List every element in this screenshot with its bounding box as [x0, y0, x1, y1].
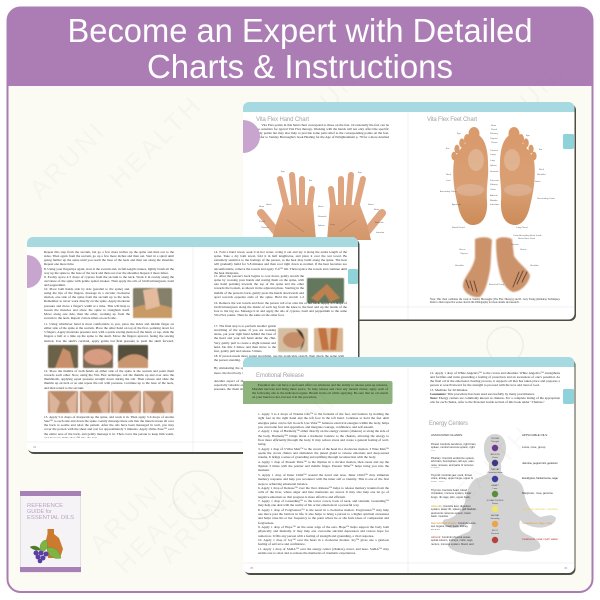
feet chart labels: Lungs: [490, 154, 497, 156]
background watermark: ARUNI: [83, 470, 172, 559]
hand chart labels: Brain: [374, 208, 380, 211]
feet chart labels: Liver: [446, 179, 451, 182]
chakra labels: ROOT: [492, 530, 499, 532]
text block: final steps and notes: 12. Apply 1 drop of White Angelica™ to the crown and shoulder. White Angelica™ strengthens and fortifies and turns grounding a feeling of protection and an awareness of one's potential. As the final oil in the emotional clearing process, it supports all that has taken place and prepares a person to search inward for the strength to proceed with the love and trust of God.: [430, 371, 560, 387]
book title: GUIDE for: [27, 509, 52, 515]
feet chart labels: Eye: [526, 135, 531, 137]
chakra labels: SOLAR PLEXUS: [487, 499, 504, 502]
feet chart labels: Intestines: [490, 203, 500, 206]
background watermark: ARUNI: [283, 55, 372, 144]
book title: ESSENTIAL OILS: [27, 515, 74, 521]
title: Charts & Instructions: [147, 48, 453, 85]
feet chart labels: Ear: [539, 148, 543, 151]
feet chart labels: Pineal: [491, 129, 498, 131]
background watermark: [23, 55, 572, 579]
feet chart labels: Eye: [457, 133, 462, 135]
chakra labels: Thought: [491, 440, 499, 443]
caption: note under feet chart: Note: This chart combines the work of Stanley Burroughs (Vita Flex Therapy) and D. Gary Young (Raindrop Technique). Refer to their respective works cited in the bibliography for more details and research.: [430, 298, 560, 304]
chakra labels: Sexuality: [491, 517, 500, 520]
page numbers: 36: [564, 566, 568, 570]
top of feet labels: Shoulder: [455, 264, 464, 267]
text block: opening steps: 9. Evenly space 4-5 drops of cypress from the sacrum to the neck. Work it in evenly along the curvature of the spine with gentle spinal strokes. Then apply the oils of birch/wintergreen, basil and peppermint.: [44, 275, 174, 287]
text block: emotional release steps: 11. Apply 1 drop of SARA™ over the energy center (chakras), navel, and nose. SARA™ may enable one to relax and to release the memories of traumatic experiences.: [258, 547, 389, 555]
hand chart labels: Intestine: [376, 231, 385, 234]
chakra labels: Love: [493, 488, 498, 490]
feet chart labels: Pancreas: [490, 179, 500, 182]
text block: emotional release steps: 10. Apply 1 drop of Joy™ over the heart in a clockwise motion. Joy™ gives one a glorious feeling of self-love and confidence.: [258, 538, 389, 546]
page number: 34: [33, 445, 37, 449]
title: Become an Expert with Detailed: [68, 12, 532, 49]
hand chart labels: Eye: [358, 172, 363, 174]
chakra labels: [487, 438, 504, 535]
feet chart labels: Kidneys: [490, 184, 499, 186]
icon: grapes: [34, 550, 48, 563]
panel watermark: HEALTH: [433, 419, 538, 524]
text block: steps 18 and closing: Another aspect of the Raindrop Technique is the Kidd Running Technique. Bergamot is an especially valuable oil, the remaining oils can be effective too. To work with these oils under the pressure, the client should lie on the spine and use more to strengthen.: [214, 379, 344, 391]
hand chart labels: Ear: [309, 179, 313, 182]
panel watermark: ARUNI: [63, 315, 152, 404]
hand chart labels: Stomach: [318, 215, 327, 218]
top of feet labels: Uterus: [520, 248, 527, 251]
feet chart labels: Ear: [446, 147, 450, 150]
text block: step 10: 10. Place both hands side by side (parallel to the spine) and, using the tips of the fingers, massage in a circular clockwise motion, one side of the spine from the sacrum up to the neck. Remember to never work directly on the spine. Apply moderate pressure and move a finger's width at a time. This will help to loosen the muscles and allow the spine to straighten itself. Move along one side, then the other, working up from the sacrum to the neck. Repeat 2 more times on each side.: [44, 287, 130, 320]
column headings: [431, 433, 548, 437]
column headings: ASSOCIATED GLANDS:: [431, 433, 463, 437]
top of feet labels: Sacrum: [511, 243, 519, 246]
hand chart labels: Brain: [259, 205, 265, 208]
text block: opening steps: [44, 250, 174, 288]
top of feet labels: Colon Ascending Brain Inside: [513, 234, 542, 237]
tab: teal page marker: [348, 269, 358, 284]
text block: steps 18 and closing: [214, 354, 344, 429]
feet chart labels: Pituitary: [490, 132, 499, 135]
feet chart labels: Ascending Colon: [440, 190, 457, 193]
text block: emotional release steps: 3. Apply 1 drop of 3 Wise Men™ to the crown of the head in a clockwise motion. 3 Wise Men™ opens the crown chakra and stimulates the pineal gland to release emotions and deep-seated trauma. It brings a sense of grounding and uplifting through reconnection with the body.: [258, 447, 389, 459]
feet chart labels: Neck: [446, 174, 452, 176]
list: applicable oils: Lotus, rose, group: [522, 445, 546, 449]
page numbers: 35: [250, 566, 254, 570]
hand chart labels: Eye: [281, 171, 286, 173]
chakra labels: HEART: [491, 484, 499, 487]
list: applicable oils: Cedarwood, sage, rose: [522, 521, 552, 525]
feet chart labels: Brain: [491, 124, 497, 127]
top of feet labels: [455, 234, 542, 286]
chart: left foot sole: [451, 127, 488, 225]
feet chart labels: Mouth Pineal: [452, 226, 465, 229]
icon: reference guide book cover: [20, 491, 81, 572]
photos: head and feet stretch: [278, 328, 343, 352]
top of feet labels: Nerve Base Point: [518, 237, 535, 240]
feet chart labels: Lung Pineal: [516, 227, 528, 229]
panel: emotional release and energy centers: [243, 357, 576, 575]
header banner: [7, 7, 593, 86]
feet chart labels: Throat: [491, 141, 498, 144]
list: applicable oils: [522, 445, 559, 541]
text block: emotional release steps: [258, 412, 389, 560]
chakra labels: Vision: [492, 457, 499, 459]
hand chart labels: Thyroid: [261, 226, 269, 229]
text block: emotional release steps: 4. Apply 1 drop of Present Time™ to the thymus in a circular motion, then rotate and tap the thymus 3 times with the pointer and middle finger. Present Time™ helps bring you into the moment.: [258, 460, 389, 472]
chakra circles: [492, 445, 498, 543]
chart: top of feet: [463, 237, 530, 297]
feet chart labels: Lung: [490, 160, 496, 162]
top of feet labels: Bracchial Palsy: [489, 283, 505, 286]
chart: right hand: [327, 175, 382, 240]
feet chart labels: Trachea: [490, 149, 499, 152]
background watermark: ARUNI: [153, 480, 242, 569]
text block: emotional release steps: 7. Apply 1 drop of Grounding™ to the lower crown, back of neck, and sternum. Grounding™ may help one deal with the reality of his or her emotions in a powerful way.: [258, 499, 389, 507]
text block: final steps and notes: Comments: This procedure has been used successfully by many practitioners.: [430, 392, 535, 396]
feet chart labels: Descending Colon: [537, 198, 556, 200]
chart: right foot sole: [500, 127, 537, 225]
text block: final steps and notes: Note: Energy centers are commonly known as chakras. For a complete listing of the appropriate oils for each chakra, refer to the Personal Guide section of this book under "Chakras.": [430, 396, 560, 404]
feet chart labels: [440, 124, 556, 229]
list: applicable oils: Eucalyptus, frankincense, sage: [522, 476, 558, 480]
text block: emotional release steps: 9. Apply 1 drop of Hope™ on the outer edge of the ears. Hope™ helps support the body both physically and mentally. It may help one overcome suicidal depression and restore hope for tomorrow. It fills any person with a feeling of strength and grounding, a vital response.: [258, 525, 389, 538]
text block: opening steps: 8. Using your fingertips again, start at the sacrum and, in full-length strokes, lightly brush all the way up the spine to the base of the neck and then out over the shoulder. Repeat 2 more times.: [44, 267, 174, 275]
hand chart labels: Heart: [318, 205, 324, 208]
photo row: three hand technique photos: [48, 345, 148, 368]
text block: final steps and notes: [430, 371, 560, 405]
chakra labels: Communication: [487, 471, 503, 474]
tab: teal page marker: [563, 134, 574, 149]
panel: raindrop technique instructions: [27, 237, 360, 454]
hand chart labels: Pineal: [259, 221, 266, 223]
icon: essential oil bottle: [46, 529, 63, 558]
hand chart labels: Heart: [266, 203, 272, 206]
chart: left hand: [261, 175, 316, 240]
list: applicable oils: Marjoram, rose, jasmine: [522, 491, 553, 495]
silhouette: seated meditation figure: [443, 434, 556, 555]
tab: teal page marker: [563, 389, 574, 404]
feet chart labels: Bladder: [490, 199, 498, 202]
chakra labels: THROAT: [491, 468, 500, 471]
chakra labels: Survival: [491, 532, 499, 535]
text block: emotional release steps: 5. Apply 1 drop of Inner Child™ around the navel and nose. Inner Child™ may stimulate memory response and help you reconnect with the inner self or identity. This is one of the first steps to achieving emotional balance.: [258, 473, 389, 486]
text block: emotional release steps: 1. Apply 3 to 4 drops of Trauma Life™ to the bottoms of the feet, and balance by holding the right foot in the right hand and the left foot in the left hand. Continue to hold the feet until energies pulse can be felt in each. Use Valor™ balances electrical energies within the body, helps you overcome fear and opposition, and integrate courage, confidence, and self-esteem.: [258, 412, 389, 429]
title: [68, 12, 532, 85]
icon: green leaves: [30, 540, 61, 559]
list: applicable oils: Cedarwood, musk, myrrh, vetiver: [522, 537, 558, 541]
panel watermark: [63, 315, 538, 524]
panel: vita flex hand and feet charts: [243, 102, 576, 321]
page numbers: [250, 566, 568, 570]
text block: step 14: 14. Fold a hand towel, soak it in hot water, wring it out and lay it along the entire length of the spine. Take a dry bath towel, fold it in half lengthwise, and place it over the wet towel. Be extremely sensitive to the feelings of the person, as the heat may build along the spine. The heat will gradually build for 5-8 minutes and then cool right down to normal. If the heat becomes too uncomfortable, remove the towels and apply V-6™ Oil. Then replace the towels and continue until the heat dissipates.: [214, 250, 347, 275]
chakra labels: Power: [492, 502, 498, 505]
text block: emotional release steps: 8. Apply 1 drop of Forgiveness™ to the navel in a clockwise motion. Forgiveness™ may help one move past the barriers in life. It also helps to bring a person to a higher spiritual awareness and helps raise his or her frequency to the point where he or she feels ideas of compassion and forgiveness.: [258, 508, 389, 525]
heading: vita flex hand chart: Vita Flex Hand Chart: [256, 117, 309, 123]
photo row: four thumb technique photos: [48, 391, 173, 413]
hand chart labels: Heart: [368, 203, 374, 206]
tab: purple section marker: [27, 255, 42, 288]
panel watermark: ARUNI: [253, 385, 342, 474]
hand chart labels: Liver: [330, 223, 335, 226]
background watermark: HEALTH: [108, 474, 213, 579]
hand chart labels: Spleen: [318, 225, 326, 227]
text block: emotional release steps: 2. Apply 1 drop of Harmony™ either directly on the energy centers (chakras) or along the side of the body. Harmony™ brings about a harmonic balance to the chakras, allowing the energy to flow more efficiently through the body. It may reduce stress and create a general feeling of well-being.: [258, 429, 389, 446]
text block: step 17: 17. The final step is to perform another gentle stretching of the spine. If you are working alone, put your right hand behind the base of the head and your left hand under the chin. Very gently pull to create a slight tension and hold. Do this 3 times, and then move to the feet, gently pull and release 3 times.: [214, 324, 276, 353]
list: applicable oils: Bergamot, jasmine, rosemary: [522, 507, 559, 511]
tab: purple section marker: [243, 120, 260, 153]
callout: green introduction box: [243, 381, 392, 404]
text block: steps 18 and closing: 18. If person needs more spinal stretching, use the applicable stretch, then check the spine with the person standing.: [214, 354, 344, 362]
top of feet labels: Shoulder: [530, 264, 539, 267]
feet chart labels: Neck: [539, 169, 545, 171]
text block: final steps and notes: 13. Meditate for 20 minutes.: [430, 388, 468, 392]
callout: green introduction box: Essential oils can have a profound effect on emotions and the ability to release pent-up tensions. Marshal nervous and bring inner peace. To help release and clear any mental clutter, apply each of the following oils to the indicated organs. Breath in the oil while applying. Be sure that no oil stands on your hand too hot, but use it in the procedure.: [252, 383, 388, 399]
top of feet labels: Uterus: [459, 248, 466, 251]
feet chart labels: Heart: [535, 180, 541, 183]
hand chart labels: [259, 171, 385, 234]
text block: step 16: 16. Remove the wet towels and have the person roll over onto his or her back. Apply 3-5 drops of birch/wintergreen along the inside of each leg from the knee to the heel and up the inside of the foot to the big toe. Massage it in and apply the oils of cypress, basil and peppermint to the same Vita Flex points. Then do the same on the other foot.: [214, 301, 347, 317]
chakra labels: CROWN: [491, 438, 500, 440]
feet chart labels: Spleen: [490, 165, 498, 167]
book title: [27, 503, 74, 521]
chakra labels: SACRAL: [491, 514, 500, 517]
feet chart labels: Appendix: [452, 203, 462, 206]
feet chart labels: Stomach: [490, 170, 499, 173]
heading: vita flex feet chart: Vita Flex Feet Chart: [427, 117, 477, 123]
chakra labels: 3RD EYE: [490, 454, 500, 456]
heading: emotional release: Emotional Release: [256, 373, 305, 379]
column headings: APPLICABLE OILS:: [522, 433, 548, 437]
text block: steps 18 and closing: By stimulating the spine and the nerves in the body, including the entire body for a month or more, the tired body and its systems feel renewed. The valuable application of this is in balance.: [214, 366, 344, 375]
feet chart labels: Colon: [490, 189, 496, 191]
text block: emotional release steps: 6. Apply 1 drop of Release™ over the liver. Release™ helps to release memory trauma from the cells of the liver, where anger and hate memories are stored. It may also help one let go of negative emotions so that progress is more effective and efficient.: [258, 486, 389, 499]
list: applicable oils: Jasmine, peppermint, geranium: [522, 461, 559, 465]
background watermark: ARUNI: [483, 55, 572, 144]
top of feet labels: Thymus: [460, 253, 469, 255]
heading: energy centers: Energy Centers: [429, 421, 468, 427]
text block: opening steps: Repeat this step from the sacrum, but go a few more inches up the spine and then out to the sides. Then again from the sacrum, go up a few more inches and then out. Start in a spiral until going further up the spine until you reach the base of the neck and then out along the shoulder. Repeat one more time.: [44, 250, 174, 266]
photo: crossed hands on back: [307, 278, 344, 303]
feet chart labels: Thyroid: [490, 137, 498, 140]
feet chart labels: Shoulder: [537, 173, 546, 176]
photo: hands on back: [133, 288, 172, 318]
feet chart labels: Adrenal: [490, 194, 498, 197]
background watermark: ARUNI: [23, 115, 112, 204]
background watermark: HEALTH: [103, 89, 208, 194]
list: associated glands: [431, 443, 478, 546]
text block: step 12: 12. Place the thumbs of both hands on either side of the spine at the sacrum and point them towards each other. Now, using the Vita Flex technique, roll the thumbs up and over onto the thumbnails, applying equal pressure straight down during the roll. Then release and slide the thumbs up an inch or so and repeat the roll with pressure. Continue up to the base of the neck, and then return to the sacrum.: [44, 369, 174, 390]
book title: REFERENCE: [27, 503, 63, 509]
hand chart labels: Adrenals: [375, 221, 385, 224]
